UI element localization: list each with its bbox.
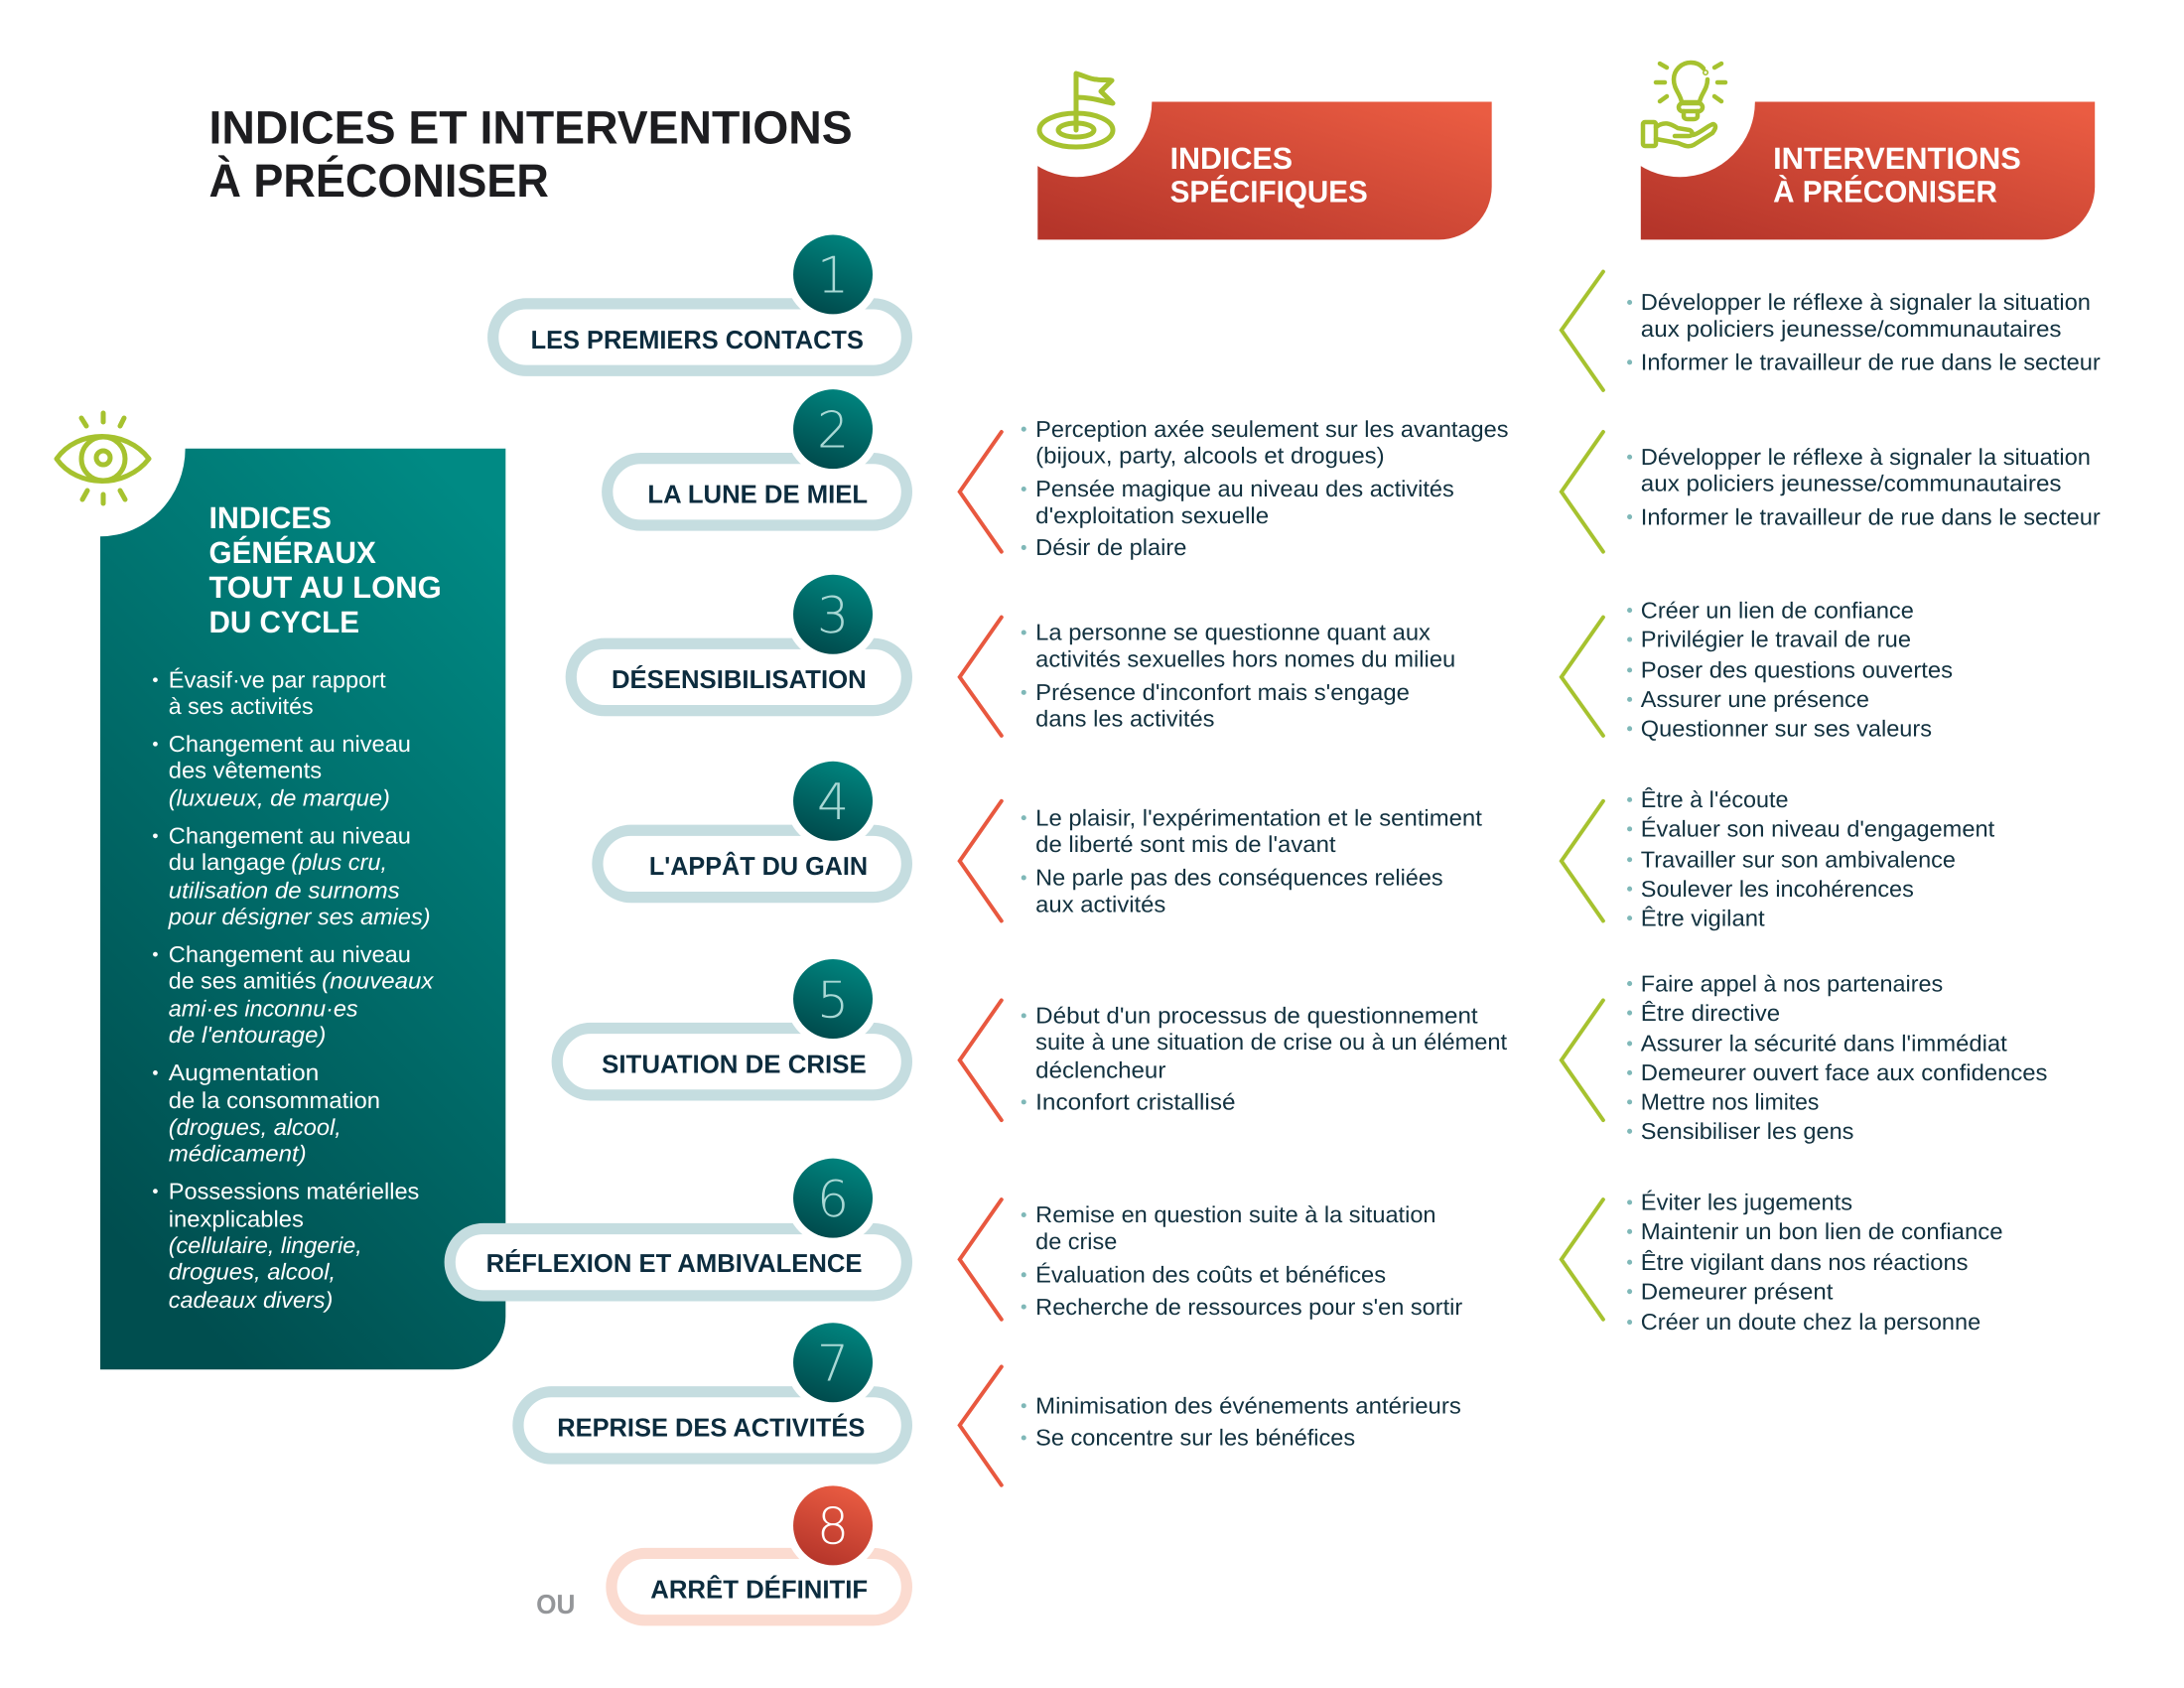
step number 4: 4 xyxy=(817,774,849,832)
interventions step 5: Mettre nos limites xyxy=(1641,1090,1819,1115)
specific indicators step 5 xyxy=(960,1000,1508,1120)
panel header: interventions à préconiser xyxy=(1604,27,2095,239)
general indicators list: du langage xyxy=(169,851,286,876)
general indicators list: (drogues, alcool, xyxy=(169,1115,341,1140)
interventions step 3: Poser des questions ouvertes xyxy=(1641,658,1953,683)
interventions step 2: Développer le réflexe à signaler la situation xyxy=(1641,445,2091,471)
specific indicators step 3: La personne se questionne quant aux xyxy=(1035,621,1432,645)
panel header: indices spécifiques xyxy=(1002,27,1492,239)
interventions step 2 xyxy=(1562,432,2102,552)
specific indicators step 5: suite à une situation de crise ou à un élément xyxy=(1035,1031,1508,1055)
panel: indices généraux xyxy=(15,360,505,1369)
interventions step 5: Assurer la sécurité dans l'immédiat xyxy=(1641,1032,2007,1056)
step label 1: LES PREMIERS CONTACTS xyxy=(531,325,864,353)
step number 6: 6 xyxy=(817,1172,849,1229)
step number 1: 1 xyxy=(817,248,849,305)
specific indicators step 6: de crise xyxy=(1035,1229,1117,1254)
specific indicators step 2: Perception axée seulement sur les avantages xyxy=(1035,417,1509,442)
header text: INTERVENTIONS xyxy=(1773,141,2021,176)
interventions step 4: Être à l'écoute xyxy=(1641,786,1789,813)
interventions step 3 xyxy=(1562,599,1953,742)
general indicators list: Changement au niveau xyxy=(169,942,411,967)
title xyxy=(208,103,853,208)
step label 5: SITUATION DE CRISE xyxy=(602,1050,867,1078)
panel background xyxy=(100,449,505,1369)
general indicators list: (nouveaux xyxy=(322,969,435,994)
interventions step 6: Demeurer présent xyxy=(1641,1280,1834,1305)
interventions step 6: Maintenir un bon lien de confiance xyxy=(1641,1219,2003,1245)
green chevron 2 xyxy=(1562,432,1603,552)
general indicators list: médicament) xyxy=(169,1142,307,1167)
specific indicators step 7: Se concentre sur les bénéfices xyxy=(1035,1426,1355,1451)
general indicators list: utilisation de surnoms xyxy=(169,879,400,904)
title: INDICES ET INTERVENTIONS xyxy=(208,103,853,155)
step label 7: REPRISE DES ACTIVITÉS xyxy=(557,1413,865,1442)
step label 8: ARRÊT DÉFINITIF xyxy=(650,1574,868,1604)
red chevron 5 xyxy=(960,1000,1002,1120)
red chevron 3 xyxy=(960,618,1002,736)
general indicators list: de l'entourage) xyxy=(169,1024,326,1049)
interventions step 1: Informer le travailleur de rue dans le secteur xyxy=(1641,351,2102,375)
header text xyxy=(1773,141,2021,209)
general indicators list: Changement au niveau xyxy=(169,824,411,849)
green chevron 3 xyxy=(1562,618,1603,736)
general indicators list: des vêtements xyxy=(169,759,322,783)
panel heading: INDICES xyxy=(208,500,332,535)
general indicators list: de ses amitiés xyxy=(169,969,316,994)
specific indicators step 5: Inconfort cristallisé xyxy=(1035,1090,1236,1115)
general indicators list: ami·es inconnu·es xyxy=(169,997,358,1022)
step 2 xyxy=(608,381,906,525)
header background xyxy=(1037,101,1492,239)
interventions step 2: Informer le travailleur de rue dans le secteur xyxy=(1641,505,2102,530)
general indicators list xyxy=(153,666,435,1313)
step 4 xyxy=(598,754,906,898)
panel notch xyxy=(15,360,186,536)
specific indicators step 4 xyxy=(960,801,1483,920)
step 3 xyxy=(571,567,906,711)
general indicators list: (plus cru, xyxy=(291,851,387,876)
interventions step 3: Privilégier le travail de rue xyxy=(1641,628,1911,652)
general indicators list: cadeaux divers) xyxy=(169,1288,333,1313)
interventions step 4 xyxy=(1562,786,1995,931)
interventions step 5: Faire appel à nos partenaires xyxy=(1641,972,1943,997)
general indicators list: inexplicables xyxy=(169,1207,304,1232)
specific indicators step 6: Remise en question suite à la situation xyxy=(1035,1203,1436,1228)
icon: flag on target xyxy=(1039,73,1113,147)
general indicators list: de la consommation xyxy=(169,1089,380,1114)
specific indicators step 3: Présence d'inconfort mais s'engage xyxy=(1035,680,1410,706)
header notch xyxy=(1002,27,1152,177)
panel heading xyxy=(208,500,442,639)
specific indicators step 6: Recherche de ressources pour s'en sortir xyxy=(1035,1295,1463,1320)
interventions step 2: aux policiers jeunesse/communautaires xyxy=(1641,472,2062,496)
general indicators list: (luxueux, de marque) xyxy=(169,786,390,811)
specific indicators step 2: (bijoux, party, alcools et drogues) xyxy=(1035,444,1385,469)
red chevron 4 xyxy=(960,801,1002,920)
step 5 xyxy=(557,951,906,1095)
panel heading: GÉNÉRAUX xyxy=(208,535,376,570)
step number 5: 5 xyxy=(817,972,849,1030)
specific indicators step 7: Minimisation des événements antérieurs xyxy=(1035,1394,1461,1419)
interventions step 6: Être vigilant dans nos réactions xyxy=(1641,1249,1969,1276)
green chevron 1 xyxy=(1562,272,1603,390)
specific indicators step 2: Désir de plaire xyxy=(1035,536,1186,561)
step label 2: LA LUNE DE MIEL xyxy=(647,480,868,508)
title: À PRÉCONISER xyxy=(208,155,549,208)
interventions step 6: Créer un doute chez la personne xyxy=(1641,1311,1980,1336)
general indicators list: Évasif·ve par rapport xyxy=(169,666,386,693)
interventions step 5: Sensibiliser les gens xyxy=(1641,1119,1853,1145)
interventions step 4: Soulever les incohérences xyxy=(1641,877,1914,903)
interventions step 5 xyxy=(1562,972,2047,1145)
specific indicators step 4: Le plaisir, l'expérimentation et le sentiment xyxy=(1035,806,1483,831)
icon: light bulb over hand xyxy=(1643,63,1725,146)
general indicators list: à ses activités xyxy=(169,694,314,720)
specific indicators step 3: dans les activités xyxy=(1035,707,1214,732)
panel heading: TOUT AU LONG xyxy=(208,570,442,605)
red chevron 2 xyxy=(960,432,1002,552)
header text xyxy=(1170,141,1368,209)
interventions step 4: Évaluer son niveau d'engagement xyxy=(1641,816,1995,842)
general indicators list: pour désigner ses amies) xyxy=(167,905,431,930)
green chevron 4 xyxy=(1562,801,1603,920)
red chevron 6 xyxy=(960,1199,1002,1320)
interventions step 1: aux policiers jeunesse/communautaires xyxy=(1641,317,2062,342)
specific indicators step 7 xyxy=(960,1366,1461,1485)
specific indicators step 2: Pensée magique au niveau des activités xyxy=(1035,478,1454,502)
step 1 xyxy=(493,227,906,370)
header text: À PRÉCONISER xyxy=(1773,174,1997,209)
step number 8: 8 xyxy=(817,1499,849,1556)
icon: eye xyxy=(57,413,149,503)
interventions step 5: Demeurer ouvert face aux confidences xyxy=(1641,1060,2047,1086)
"ou" label: OU xyxy=(536,1590,575,1620)
interventions step 5: Être directive xyxy=(1641,1000,1780,1026)
interventions step 4: Être vigilant xyxy=(1641,905,1765,931)
step 8 xyxy=(612,1478,906,1620)
general indicators list: Augmentation xyxy=(169,1060,319,1086)
specific indicators step 3 xyxy=(960,618,1455,736)
interventions step 3: Assurer une présence xyxy=(1641,687,1869,713)
general indicators list: drogues, alcool, xyxy=(169,1260,336,1285)
step 7 xyxy=(518,1316,906,1459)
specific indicators step 5: déclencheur xyxy=(1035,1058,1166,1083)
header text: SPÉCIFIQUES xyxy=(1170,174,1368,209)
green chevron 5 xyxy=(1562,1000,1603,1120)
step number 2: 2 xyxy=(817,403,849,460)
specific indicators step 3: activités sexuelles hors nomes du milieu xyxy=(1035,647,1455,672)
interventions step 1: Développer le réflexe à signaler la situation xyxy=(1641,291,2091,316)
specific indicators step 2 xyxy=(960,417,1509,561)
interventions step 1 xyxy=(1562,272,2102,390)
interventions step 6 xyxy=(1562,1190,2003,1336)
step label 4: L'APPÂT DU GAIN xyxy=(649,851,868,881)
specific indicators step 4: Ne parle pas des conséquences reliées xyxy=(1035,866,1443,891)
interventions step 3: Créer un lien de confiance xyxy=(1641,599,1914,624)
specific indicators step 4: aux activités xyxy=(1035,893,1165,917)
specific indicators step 6 xyxy=(960,1199,1463,1320)
specific indicators step 4: de liberté sont mis de l'avant xyxy=(1035,832,1336,858)
step number 7: 7 xyxy=(817,1336,849,1393)
step 6 xyxy=(450,1151,906,1296)
step label 6: RÉFLEXION ET AMBIVALENCE xyxy=(486,1248,862,1278)
interventions step 4: Travailler sur son ambivalence xyxy=(1641,848,1956,873)
specific indicators step 6: Évaluation des coûts et bénéfices xyxy=(1035,1261,1386,1288)
header notch xyxy=(1604,27,1755,177)
step number 3: 3 xyxy=(817,588,849,645)
specific indicators step 5: Début d'un processus de questionnement xyxy=(1035,1004,1478,1029)
interventions step 3: Questionner sur ses valeurs xyxy=(1641,717,1932,742)
general indicators list: Changement au niveau xyxy=(169,732,411,758)
panel heading: DU CYCLE xyxy=(208,605,359,639)
header background xyxy=(1641,101,2095,239)
green chevron 6 xyxy=(1562,1199,1603,1320)
red chevron 7 xyxy=(960,1366,1002,1485)
general indicators list: Possessions matérielles xyxy=(169,1180,419,1204)
specific indicators step 2: d'exploitation sexuelle xyxy=(1035,503,1269,528)
header text: INDICES xyxy=(1170,141,1293,176)
step label 3: DÉSENSIBILISATION xyxy=(612,664,867,694)
general indicators list: (cellulaire, lingerie, xyxy=(169,1233,362,1259)
interventions step 6: Éviter les jugements xyxy=(1641,1190,1852,1215)
